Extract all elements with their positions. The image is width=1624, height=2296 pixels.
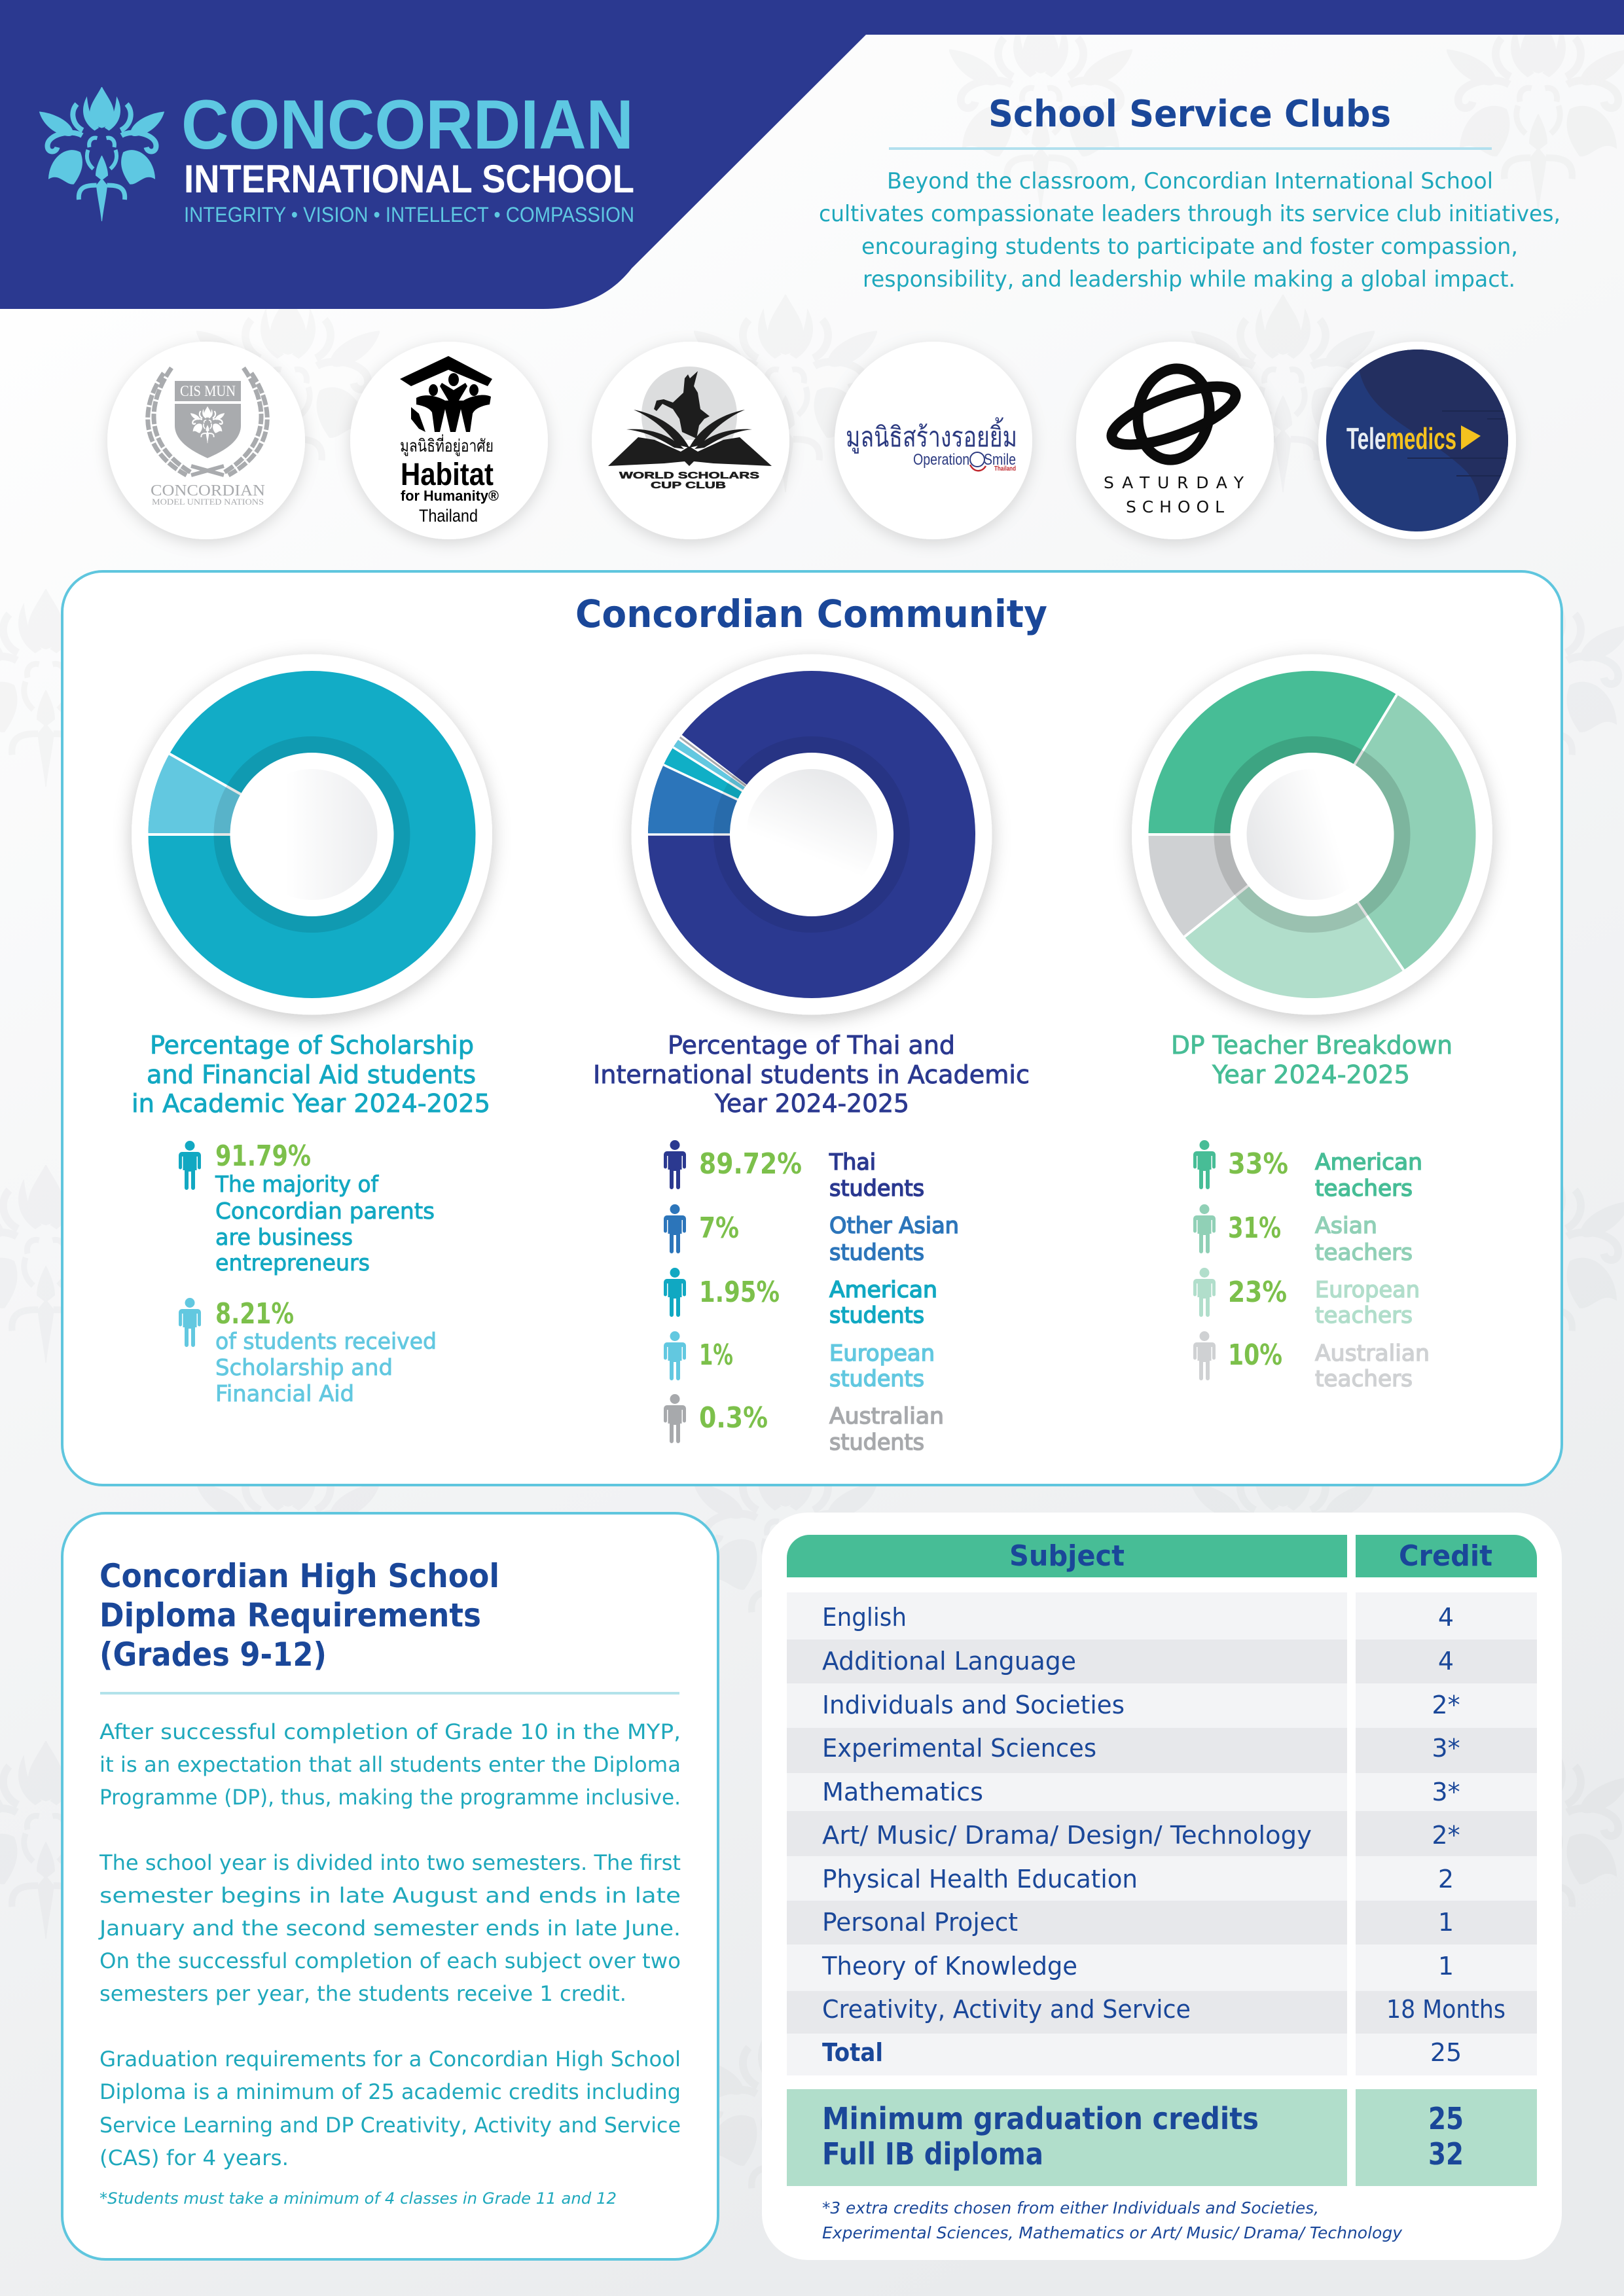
table rows: subjects: Theory of Knowledge [821,1952,1077,1981]
panel: High School Diploma Requirements [62,1513,718,2259]
text block: semesters and credit: semesters per year, the students receive 1 credit. [99,1981,626,2006]
chart caption: Thai and international: Percentage of Thai and [668,1031,955,1060]
text block: diploma programme: Programme (DP), thus, making the programme inclusive. [99,1785,681,1810]
row: European teachers: European [1315,1277,1420,1303]
table header: Subject [1009,1539,1125,1573]
table rows: subjects [821,1603,1312,2067]
club badge: Telemedics: Telemedics [1346,422,1456,456]
row: European students: 1% [699,1338,733,1372]
club badge: World Scholars Cup Club: CUP CLUB [651,480,726,491]
table rows: credits: 4 [1438,1647,1454,1676]
stat: 8.21% scholarship: 8.21% [215,1297,294,1331]
panel: credit table [762,1513,1562,2260]
row: American students: 1.95% [699,1276,780,1309]
row: Asian teachers: 31% [1228,1211,1281,1245]
club badge: Operation Smile Thailand: มูลนิธิสร้างรอยยิ้ม [846,417,1017,454]
chart caption: DP teachers [1171,1031,1453,1089]
footnote: minimum classes: *Students must take a minimum of 4 classes in Grade 11 and 12 [99,2189,617,2208]
icon: Concordian flower emblem [39,87,164,221]
table rows: subjects: Personal Project [822,1908,1018,1937]
text block: clubs intro [819,168,1561,293]
header banner [0,0,1624,309]
summary: minimum credits: Minimum graduation credits [822,2101,1259,2136]
footnote: extra credits [822,2198,1403,2242]
text block: graduation requirements: (CAS) for 4 years. [99,2145,289,2170]
table rows: subjects: Additional Language [822,1647,1076,1676]
stat: 91.79% parents: entrepreneurs [215,1250,370,1276]
text block: graduation requirements: Diploma is a minimum of 25 academic credits including [99,2079,681,2104]
summary: minimum credits: 25 [1428,2101,1464,2136]
row: Thai students: Thai [829,1149,876,1175]
club badge: World Scholars Cup Club: WORLD SCHOLARS [619,470,759,481]
table rows: credits: 2* [1432,1691,1460,1719]
row: American students: American [829,1277,937,1303]
footnote: extra credits: Experimental Sciences, Mathematics or Art/ Music/ Drama/ Technology [822,2223,1403,2242]
logo tagline: INTEGRITY • VISION • INTELLECT • COMPASSION [184,203,634,226]
summary: minimum credits: Full IB diploma [822,2136,1043,2172]
logo subtitle: INTERNATIONAL SCHOOL [184,157,634,201]
text block: semesters and credit: On the successful completion of each subject over two [99,1948,681,1973]
club badge: Concordian Model United Nations: CONCORDIAN [151,482,265,499]
table header [787,1535,1537,1577]
heading: diploma requirements [99,1557,499,1674]
row: American teachers [1193,1140,1422,1202]
row: American students [664,1268,937,1329]
donut chart: Thai and international students [631,655,992,1014]
stat: 8.21% scholarship: Scholarship and [215,1355,393,1381]
table rows: credits: 2 [1438,1865,1454,1893]
table rows: subjects: Experimental Sciences [822,1734,1096,1763]
text block: graduation requirements: Service Learning and DP Creativity, Activity and Service [99,2113,681,2138]
club badge: World Scholars Cup Club [592,342,789,539]
club badge: Saturday School [1076,342,1274,539]
donut chart: scholarship share [132,655,492,1014]
row: American teachers: 33% [1228,1147,1288,1181]
row: Australian teachers: 10% [1228,1338,1282,1372]
club badge: Habitat for Humanity Thailand: for Humanity® [401,488,499,504]
club badge: Saturday School: SATURDAY [1104,473,1244,492]
chart caption: Thai and international: International students in Academic [593,1060,1030,1089]
row: Thai students: 89.72% [699,1147,802,1181]
text block: diploma programme [99,1719,681,1810]
text block: clubs intro: Beyond the classroom, Concordian International School [887,168,1493,194]
stat: 91.79% parents: The majority of [215,1172,379,1198]
table rows: subjects: Art/ Music/ Drama/ Design/ Technology [822,1821,1312,1850]
row: Other Asian students: students [829,1240,924,1266]
table rows: credits: 1 [1438,1952,1454,1981]
club badge: Operation Smile Thailand: Thailand [994,465,1016,473]
row: Australian teachers: teachers [1315,1366,1413,1392]
stat: 8.21% scholarship: of students received [215,1329,437,1355]
text block: clubs intro: cultivates compassionate leaders through its service club initiatives, [819,201,1561,227]
table rows: subjects: English [822,1603,907,1632]
table rows: credits: 25 [1430,2038,1462,2067]
table rows: credits [1386,1603,1506,2067]
club badge: Concordian Model United Nations: MODEL UNITED NATIONS [152,497,264,507]
club badge: Habitat for Humanity Thailand: Habitat [401,457,494,492]
teacher legend: nationality breakdown [1193,1140,1430,1392]
row: Asian teachers: Asian [1315,1213,1377,1239]
table rows: subjects: Mathematics [822,1778,983,1806]
student legend: nationality breakdown [664,1140,959,1456]
chart caption: scholarship: Percentage of Scholarship [150,1031,474,1060]
text block: clubs intro: encouraging students to participate and foster compassion, [861,234,1518,260]
row: Australian teachers [1193,1331,1430,1392]
summary: minimum credits: 32 [1428,2136,1464,2172]
table rows: subjects: Creativity, Activity and Service [822,1995,1191,2024]
stat: 8.21% scholarship [179,1297,437,1407]
chart caption: Thai and international [593,1031,1030,1118]
row: Australian students: Australian [829,1403,944,1429]
text block: diploma programme: it is an expectation that all students enter the Diploma [99,1752,681,1777]
row: Thai students: students [829,1175,924,1202]
row: Australian students: students [829,1429,924,1456]
row: Other Asian students: Other Asian [829,1213,959,1239]
table rows: credits: 18 Months [1386,1995,1506,2024]
chart caption: scholarship: in Academic Year 2024-2025 [132,1089,490,1118]
stat: 8.21% scholarship: Financial Aid [215,1381,354,1407]
row: Other Asian students: 7% [699,1211,739,1245]
summary: minimum credits [787,2089,1537,2186]
table rows: credits: 3* [1432,1778,1460,1806]
heading: diploma requirements: Diploma Requirements [99,1596,481,1634]
footnote: extra credits: *3 extra credits chosen from either Individuals and Societies, [822,2198,1319,2217]
row: American teachers: teachers [1315,1175,1413,1202]
row: Australian students: 0.3% [699,1401,768,1435]
panel: Concordian Community [62,571,1562,1485]
club badge: Habitat for Humanity Thailand [350,342,548,539]
stat: 91.79% parents: are business [215,1225,353,1251]
row: European teachers: teachers [1315,1302,1413,1329]
logo: Concordian International School [39,85,634,226]
text block: semesters and credit: The school year is divided into two semesters. The first [99,1850,681,1875]
chart caption: Thai and international: Year 2024-2025 [714,1089,909,1118]
text block: semesters and credit [98,1850,681,2006]
row: European students [664,1331,935,1392]
club badge: Operation Smile Thailand: Operation Smile [913,451,1016,469]
row: European teachers: 23% [1228,1276,1287,1309]
stat: 91.79% parents: Concordian parents [215,1198,435,1225]
chart caption: DP teachers: DP Teacher Breakdown [1171,1031,1453,1060]
table rows: subjects: Total [822,2038,883,2067]
text block: semesters and credit: semester begins in late August and ends in late [99,1883,681,1908]
row: Asian teachers [1193,1204,1413,1266]
text block: graduation requirements: Graduation requirements for a Concordian High School [99,2047,681,2072]
text block: diploma programme: After successful completion of Grade 10 in the MYP, [99,1719,681,1744]
text block: semesters and credit: January and the second semester ends in late June. [98,1916,681,1941]
row: European students: European [829,1340,935,1367]
heading: School Service Clubs: School Service Clubs [988,93,1391,135]
donut chart: DP teacher breakdown [1132,655,1492,1014]
table rows: subjects: Physical Health Education [822,1865,1138,1893]
row: Other Asian students [664,1204,959,1266]
club badge: Saturday School: SCHOOL [1126,497,1224,516]
chart caption: scholarship [132,1031,490,1118]
row: European teachers [1193,1268,1420,1329]
club badge: Habitat for Humanity Thailand: มูลนิธิที่อยู่อาศัย [400,434,494,456]
heading: Concordian Community: Concordian Community [575,592,1047,636]
club badge: Concordian Model United Nations [107,342,305,539]
table rows: subjects: Individuals and Societies [822,1691,1125,1719]
stat: 91.79% parents [179,1139,435,1276]
club badge: Habitat for Humanity Thailand: Thailand [419,506,478,526]
row: Australian teachers: Australian [1315,1340,1430,1367]
heading: diploma requirements: (Grades 9-12) [99,1636,327,1674]
table rows: credits: 2* [1432,1821,1460,1850]
table rows: credits: 3* [1432,1734,1460,1763]
row: American teachers: American [1315,1149,1422,1175]
chart caption: scholarship: and Financial Aid students [147,1060,476,1089]
text block: graduation requirements [99,2047,681,2170]
text block: clubs intro: responsibility, and leadership while making a global impact. [863,266,1515,293]
chart caption: DP teachers: Year 2024-2025 [1212,1060,1410,1089]
row: Asian teachers: teachers [1315,1240,1413,1266]
row: American students: students [829,1302,924,1329]
logo wordmark: CONCORDIAN [181,85,634,164]
heading: diploma requirements: Concordian High School [99,1557,499,1595]
table rows: credits: 4 [1438,1603,1454,1632]
table rows: credits: 1 [1438,1908,1454,1937]
row: Australian students [664,1394,944,1456]
club badge: Concordian Model United Nations: CIS MUN [180,383,236,399]
row: European students: students [829,1366,924,1392]
club badge: Telemedics [1318,327,1519,539]
table header: Credit [1399,1539,1492,1573]
stat: 91.79% parents: 91.79% [215,1139,311,1173]
row: Thai students [664,1140,924,1202]
club badge: Operation Smile Thailand [835,342,1032,539]
